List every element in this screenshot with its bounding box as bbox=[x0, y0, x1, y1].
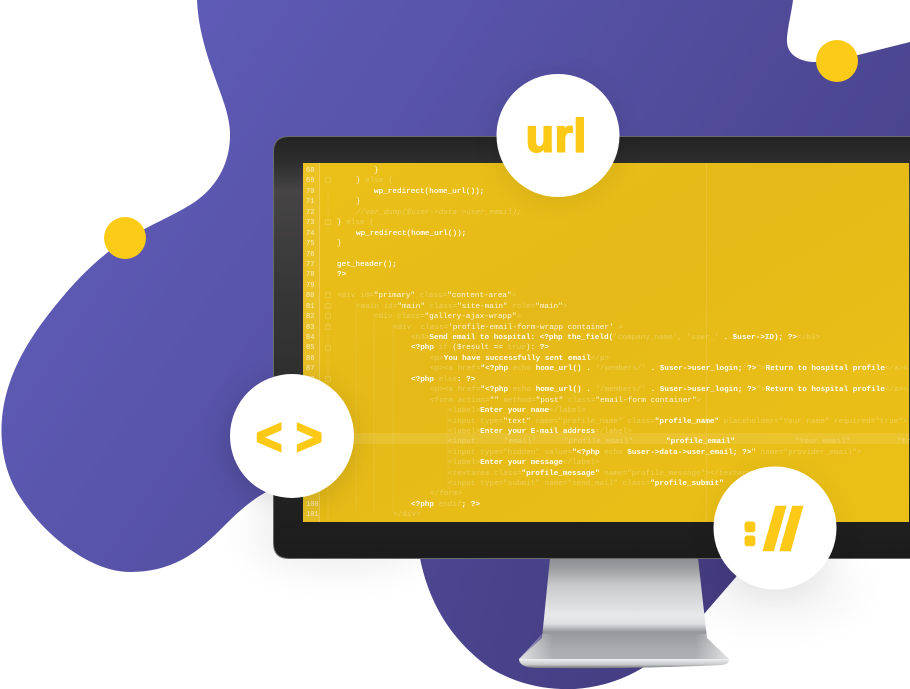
line numbers: 72 bbox=[306, 209, 314, 217]
soft shadow below monitor, left bbox=[250, 500, 430, 570]
line numbers: 87 bbox=[306, 365, 314, 373]
yellow dot: left bbox=[104, 217, 146, 259]
source code text: <form action="" method="post" class="email-form container"> bbox=[430, 397, 702, 405]
source code text: wp_redirect(home_url()); bbox=[374, 188, 484, 196]
source code text: ?> bbox=[337, 271, 347, 279]
badge: code brackets: > bbox=[296, 410, 322, 466]
source code text: <p><a href="<?php echo home_url() . '/members/' . $user->user_login; ?>">Return to hospital profile</a>< bbox=[430, 386, 908, 394]
source code text: 'profile-email-form-wrapp container' > bbox=[448, 324, 623, 332]
source code text: wp_redirect(home_url()); bbox=[356, 230, 466, 238]
soft shadow below monitor, right bbox=[690, 558, 860, 622]
source code text: <input bbox=[448, 438, 476, 446]
source code text bbox=[337, 167, 910, 519]
monitor bbox=[274, 136, 910, 668]
source code text: <label>Enter your E-mail address</label> bbox=[448, 428, 632, 436]
source code text: class= bbox=[421, 324, 449, 332]
source code text: } else { bbox=[356, 177, 393, 185]
source code text: get_header(); bbox=[337, 261, 397, 269]
source code text: "Your email" bbox=[795, 438, 850, 446]
source code text: <p>You have successfully sent email</p> bbox=[430, 355, 610, 363]
badge: code brackets bbox=[228, 374, 354, 504]
monitor bezel bbox=[274, 136, 910, 558]
source code text: "profile_email" bbox=[564, 438, 633, 446]
line numbers: 77 bbox=[306, 261, 314, 269]
line numbers: 70 bbox=[306, 188, 314, 196]
source code text: <textarea class="profile_message" name="profile_message"></textarea> bbox=[448, 470, 761, 478]
source code text: <div bbox=[393, 324, 412, 332]
source code text: "email" bbox=[504, 438, 536, 446]
source code text: //var_dump($user->data->user_email); bbox=[356, 209, 521, 217]
source code text: <?php endif; ?> bbox=[411, 501, 480, 509]
source code text: <?php else: ?> bbox=[411, 376, 476, 384]
source code text: <input type="hidden" value="<?php echo $user->data->user_email; ?>" name="provider_email"> bbox=[448, 449, 862, 457]
line numbers bbox=[306, 167, 319, 519]
line numbers: 88 bbox=[306, 376, 314, 384]
line numbers: 85 bbox=[306, 344, 314, 352]
editor gutter bbox=[303, 163, 909, 522]
badge: colon slash slash: // bbox=[762, 497, 804, 563]
line numbers: 79 bbox=[306, 282, 314, 290]
source code text: "profile_email" bbox=[666, 438, 735, 446]
line numbers: 81 bbox=[306, 303, 314, 311]
source code text: <div class="gallery-ajax-wrapp"> bbox=[374, 313, 521, 321]
line numbers: 86 bbox=[306, 355, 314, 363]
line numbers: 71 bbox=[306, 198, 314, 206]
monitor stand bbox=[519, 558, 729, 668]
source code text: } bbox=[337, 240, 342, 248]
line numbers: 82 bbox=[306, 313, 314, 321]
background blob: lower lobe behind stand bbox=[415, 530, 760, 689]
source code text: </form> bbox=[430, 490, 463, 498]
badge: colon slash slash: : bbox=[744, 511, 756, 553]
badge: code brackets: < bbox=[256, 410, 282, 466]
source code text: } bbox=[356, 198, 361, 206]
badge: url bbox=[496, 74, 620, 200]
line numbers: 83 bbox=[306, 324, 314, 332]
source code text: </div> bbox=[393, 511, 421, 519]
source code text: <div id="primary" class="content-area"> bbox=[337, 292, 517, 300]
line numbers: 75 bbox=[306, 240, 314, 248]
source code text: <main id="main" class="site-main" role="main"> bbox=[356, 303, 568, 311]
source code text: <input type="text" name="profile_name" class="profile_name" placeholder="Your name" required="true"> bbox=[448, 418, 908, 426]
source code text: <p><a href="<?php echo home_url() . '/members/' . $user->user_login; ?>">Return to hospital profile</a>< bbox=[430, 365, 908, 373]
line numbers: 84 bbox=[306, 334, 314, 342]
badge: colon slash slash bbox=[713, 466, 837, 595]
line numbers: 73 bbox=[306, 219, 314, 227]
line numbers: 80 bbox=[306, 292, 314, 300]
code lines bbox=[306, 167, 910, 519]
source code text: <input type="submit" name="send_mail" class="profile_submit" bbox=[448, 480, 724, 488]
line numbers: 74 bbox=[306, 230, 314, 238]
source code text: } bbox=[374, 167, 379, 175]
screen bbox=[303, 163, 909, 522]
source code text: <h3>Send email to hospital: <?php the_field('company_name', 'user_' . $user->ID); ?></h3> bbox=[411, 334, 820, 342]
line numbers: 100 bbox=[306, 501, 319, 509]
yellow dot: top right bbox=[816, 40, 858, 82]
source code text: } else { bbox=[337, 219, 374, 227]
line numbers: 78 bbox=[306, 271, 314, 279]
line numbers: 68 bbox=[306, 167, 314, 175]
line numbers: 101 bbox=[306, 511, 319, 519]
badge: url: url bbox=[526, 110, 587, 162]
line numbers: 76 bbox=[306, 251, 314, 259]
line numbers: 69 bbox=[306, 177, 314, 185]
source code text: <label>Enter your name</label> bbox=[448, 407, 586, 415]
source code text: <label>Enter your message</label> bbox=[448, 459, 600, 467]
source code text: <?php if ($result == true): ?> bbox=[411, 344, 549, 352]
